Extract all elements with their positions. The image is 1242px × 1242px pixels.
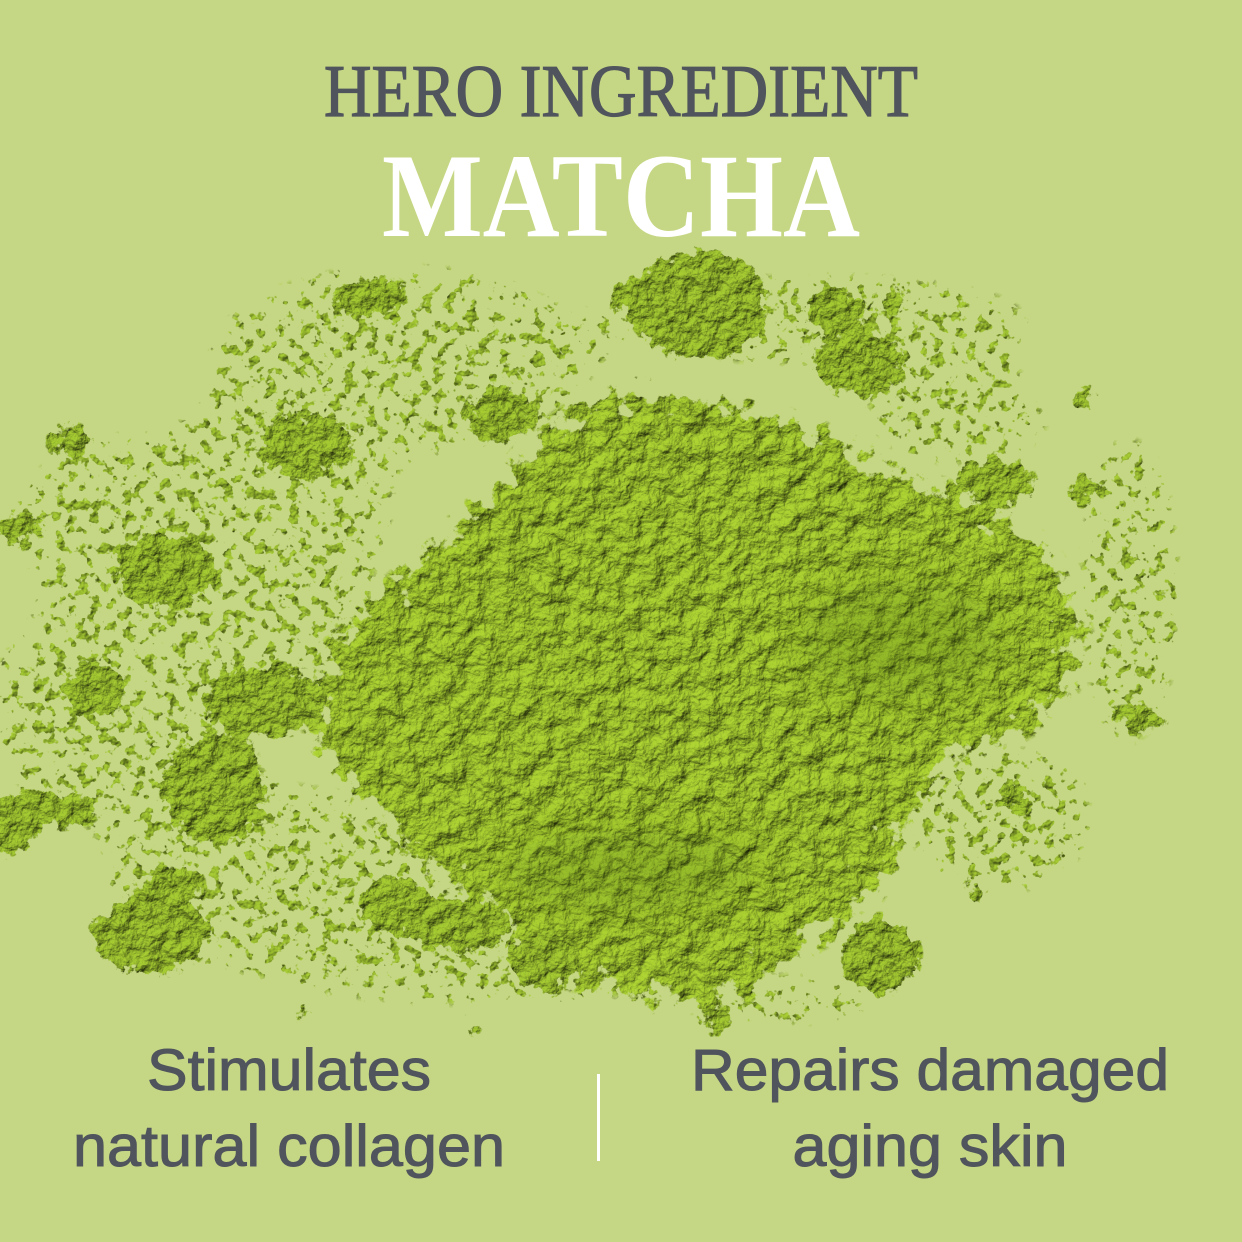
benefit: stimulates natural collagen: natural collagen <box>73 1114 505 1179</box>
benefit: stimulates natural collagen <box>73 1038 505 1179</box>
scattered powder specks <box>0 250 1195 1040</box>
matcha powder pile <box>0 250 1195 1040</box>
benefit: stimulates natural collagen: Stimulates <box>147 1038 431 1103</box>
mound shading <box>500 580 1000 910</box>
benefit: repairs damaged aging skin <box>691 1038 1169 1179</box>
benefit: repairs damaged aging skin: Repairs damaged <box>691 1038 1169 1103</box>
benefit: repairs damaged aging skin: aging skin <box>792 1114 1068 1179</box>
heading: matcha: MATCHA <box>382 129 860 262</box>
heading: hero ingredient: HERO INGREDIENT <box>324 51 918 133</box>
main powder mound <box>300 385 1085 1010</box>
powder clumps <box>0 250 1173 1037</box>
divider <box>597 1074 600 1161</box>
